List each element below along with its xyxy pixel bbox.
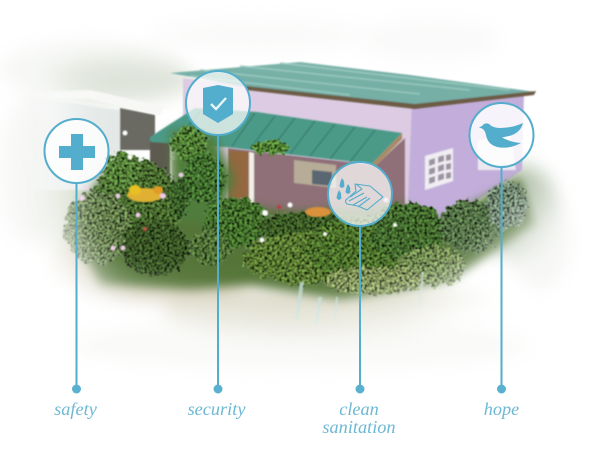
icon: washing hands: [337, 178, 383, 210]
label: security: security: [188, 399, 246, 419]
garden posts: [295, 272, 424, 325]
marker: clean sanitation: [322, 162, 396, 437]
house walls: [150, 78, 524, 225]
main roof: [170, 62, 536, 109]
label: hope: hope: [484, 399, 519, 419]
marker: safety: [44, 119, 108, 419]
marker: security: [186, 71, 250, 419]
vent blocks: [425, 148, 453, 190]
backdrop trees and ground: [18, 58, 560, 345]
white shed: [48, 90, 156, 190]
porch roof: [150, 108, 402, 167]
label: clean sanitation: clean: [339, 399, 379, 419]
label: clean sanitation: sanitation: [322, 417, 396, 437]
marker: hope: [470, 103, 534, 419]
foliage: [64, 127, 527, 294]
photo: house with garden: [18, 58, 560, 345]
icon: cross: [59, 134, 95, 170]
icon: dove: [479, 123, 523, 148]
icon: shield with check: [203, 85, 233, 123]
label: safety: safety: [54, 399, 98, 419]
photo haze background: [0, 17, 570, 369]
flowers: [79, 130, 397, 250]
foliage underlay: [72, 130, 535, 300]
